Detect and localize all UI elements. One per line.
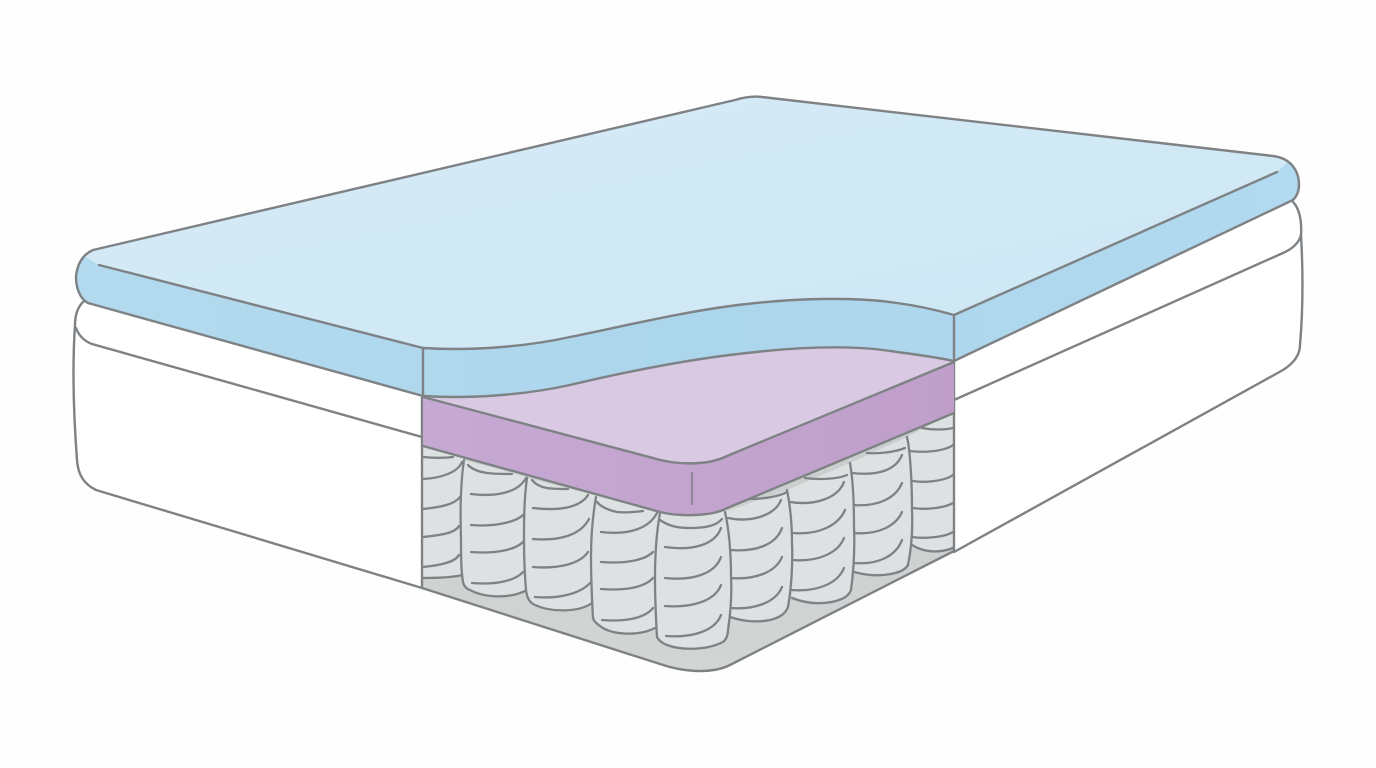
spring 2 (460, 460, 527, 596)
spring 1 (422, 445, 464, 579)
comfort foam layer (purple) (423, 347, 954, 515)
foam top face (423, 347, 954, 463)
top layer side face (76, 97, 1299, 397)
spring 6 (725, 490, 792, 621)
base fabric (422, 410, 954, 671)
base outline (422, 551, 954, 671)
spring layer edges (422, 362, 954, 588)
spring 4 (591, 496, 660, 634)
spring 5 (655, 512, 731, 649)
spring 7 (787, 463, 855, 603)
top surface (84, 97, 1288, 349)
top layer outline (76, 97, 1299, 397)
spring 3 (524, 478, 597, 610)
top foam layer (blue) (76, 97, 1299, 397)
spring 9 (907, 412, 954, 551)
spring 8 (850, 437, 912, 575)
mattress base body (74, 202, 1302, 588)
foam side face (423, 362, 954, 515)
pocket spring layer (422, 362, 954, 671)
